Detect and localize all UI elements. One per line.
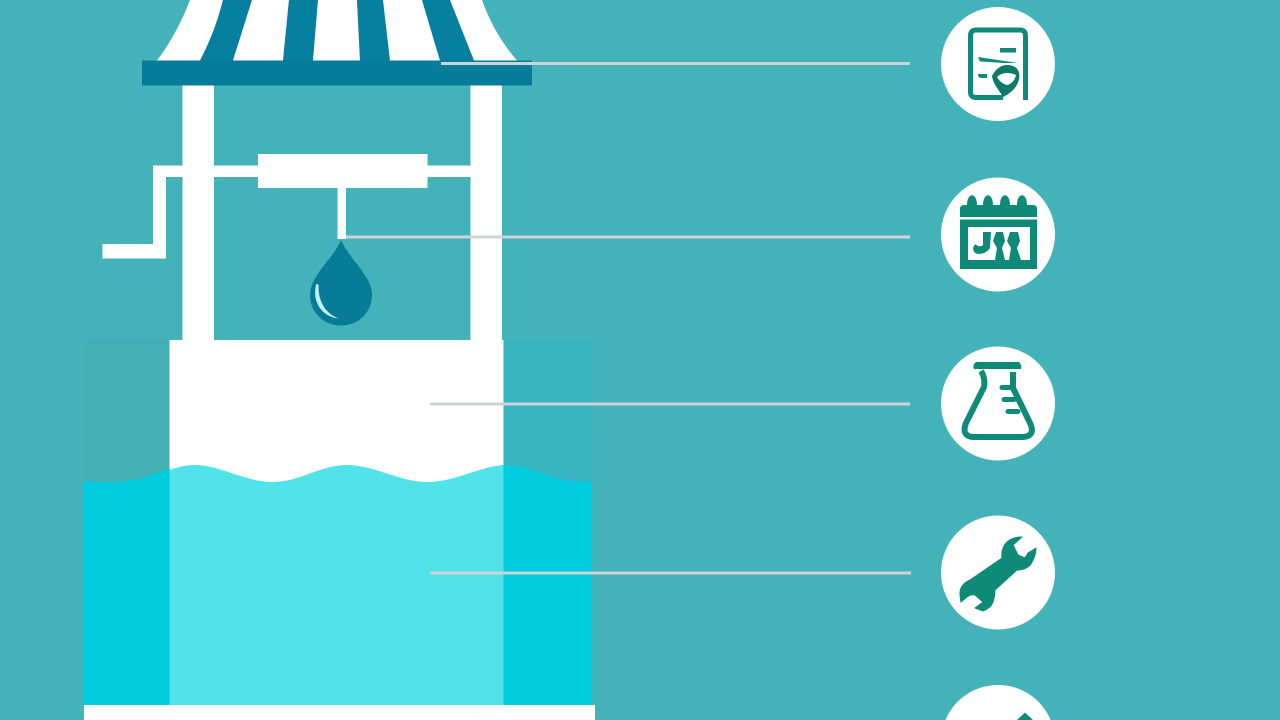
connector lines	[346, 62, 911, 574]
roof	[142, 0, 532, 86]
water center	[170, 465, 504, 705]
support posts	[182, 86, 502, 340]
well illustration	[84, 0, 595, 720]
icon: wrench	[941, 516, 1055, 630]
well shaft	[170, 340, 504, 490]
well base	[84, 705, 595, 720]
icon: flask	[941, 346, 1055, 460]
icon: document	[941, 7, 1055, 121]
icon: water drop	[310, 240, 372, 326]
water side left	[84, 469, 170, 705]
crank and drum	[102, 154, 471, 258]
icon: partial bottom badge	[945, 685, 1051, 720]
water side right	[504, 465, 592, 705]
icon: calendar	[941, 178, 1055, 292]
well side walls	[84, 340, 592, 485]
